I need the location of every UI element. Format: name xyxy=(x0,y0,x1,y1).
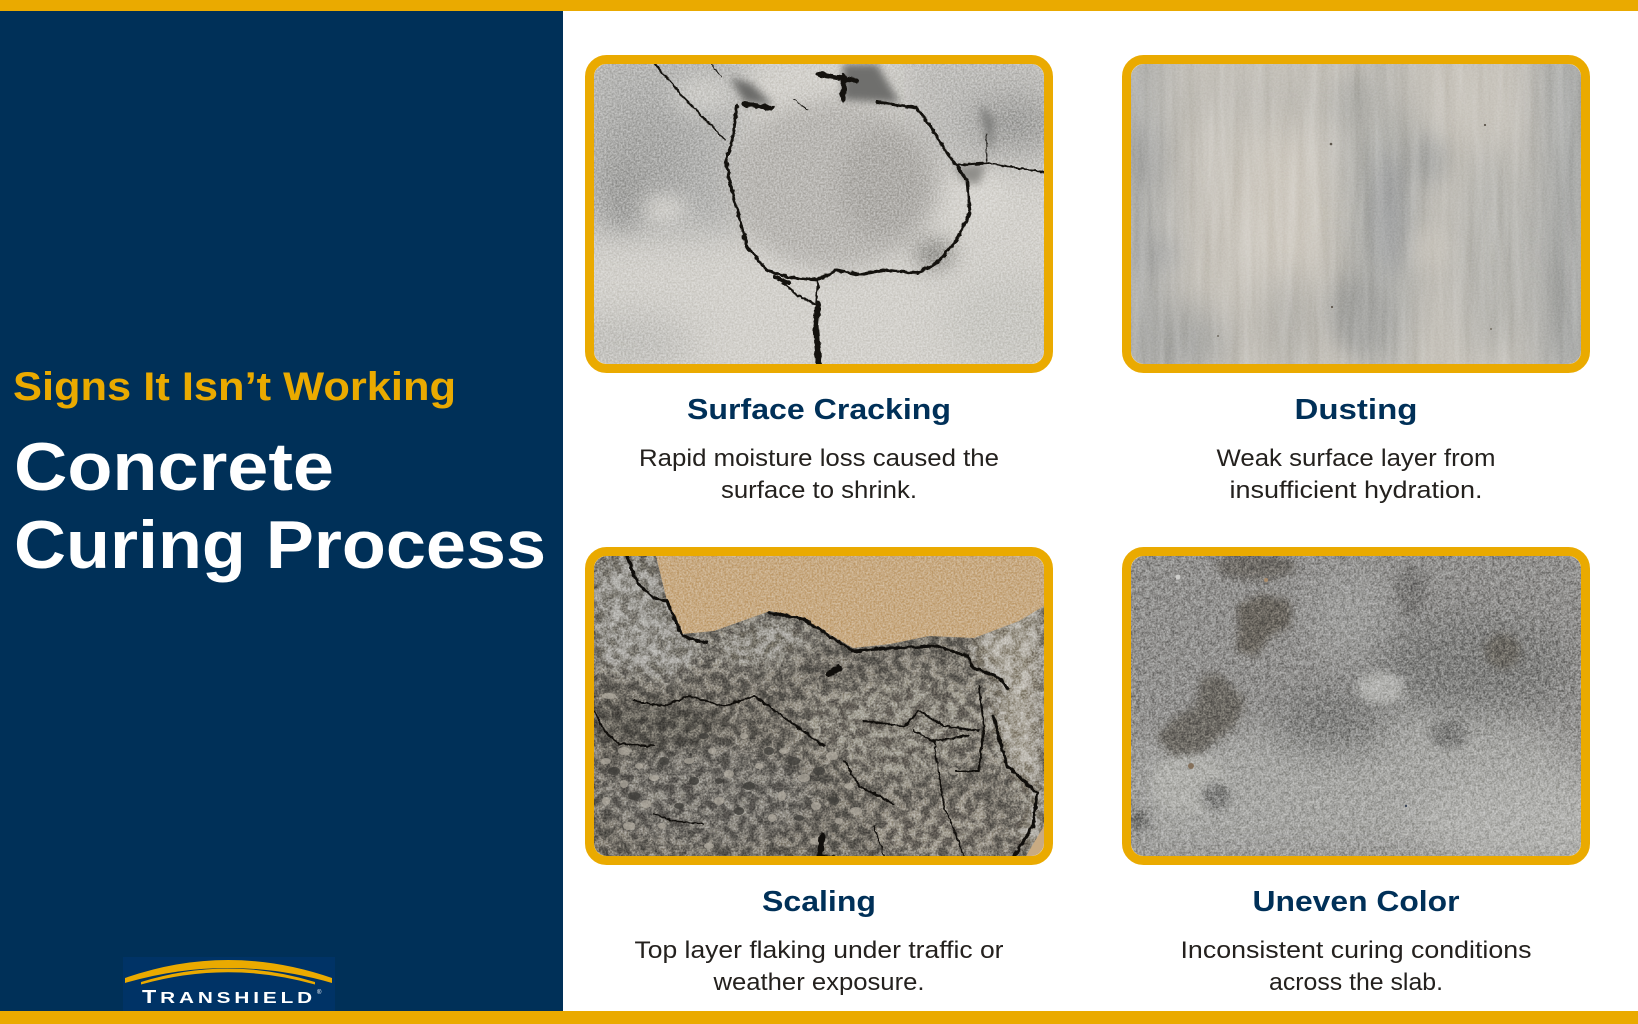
heading: Surface Cracking xyxy=(687,394,951,426)
description xyxy=(1216,445,1496,504)
logo: Transhield: ® xyxy=(317,989,322,996)
panel: scaling xyxy=(584,552,1048,996)
photo: scaling surface xyxy=(584,556,1044,858)
logo: Transhield: T RANSHIELD xyxy=(142,987,316,1007)
panel: surface cracking xyxy=(585,55,1053,498)
panel: uneven color xyxy=(1126,552,1638,996)
top gold bar xyxy=(0,0,1638,11)
photo border xyxy=(1126,60,1586,368)
title xyxy=(14,429,546,583)
panel: dusting xyxy=(1101,44,1606,504)
heading: Uneven Color xyxy=(1252,886,1460,918)
description: Top layer flaking under traffic or xyxy=(634,937,1004,964)
photo border xyxy=(1126,552,1586,860)
description: across the slab. xyxy=(1269,969,1443,996)
photo: uneven color surface xyxy=(1131,556,1581,856)
bottom gold bar xyxy=(0,1011,1638,1024)
description: Weak surface layer from xyxy=(1216,445,1496,472)
description: insufficient hydration. xyxy=(1230,477,1482,504)
description xyxy=(634,937,1004,996)
photo: dusty surface xyxy=(1131,64,1581,364)
logo: Transhield xyxy=(123,957,335,1011)
description: surface to shrink. xyxy=(721,477,917,504)
subtitle: Signs It Isn’t Working xyxy=(13,365,456,409)
photo border xyxy=(590,552,1048,860)
title: Concrete xyxy=(14,429,334,505)
description: Inconsistent curing conditions xyxy=(1180,937,1532,964)
description: Rapid moisture loss caused the xyxy=(639,445,999,472)
description: weather exposure. xyxy=(712,969,924,996)
title: Curing Process xyxy=(14,507,546,583)
heading: Dusting xyxy=(1294,394,1418,426)
photo border xyxy=(590,60,1048,368)
description xyxy=(1180,937,1532,996)
heading: Scaling xyxy=(762,886,876,918)
tan render layer xyxy=(656,556,1044,856)
description xyxy=(639,445,999,504)
photo: cracked surface xyxy=(594,64,1044,364)
